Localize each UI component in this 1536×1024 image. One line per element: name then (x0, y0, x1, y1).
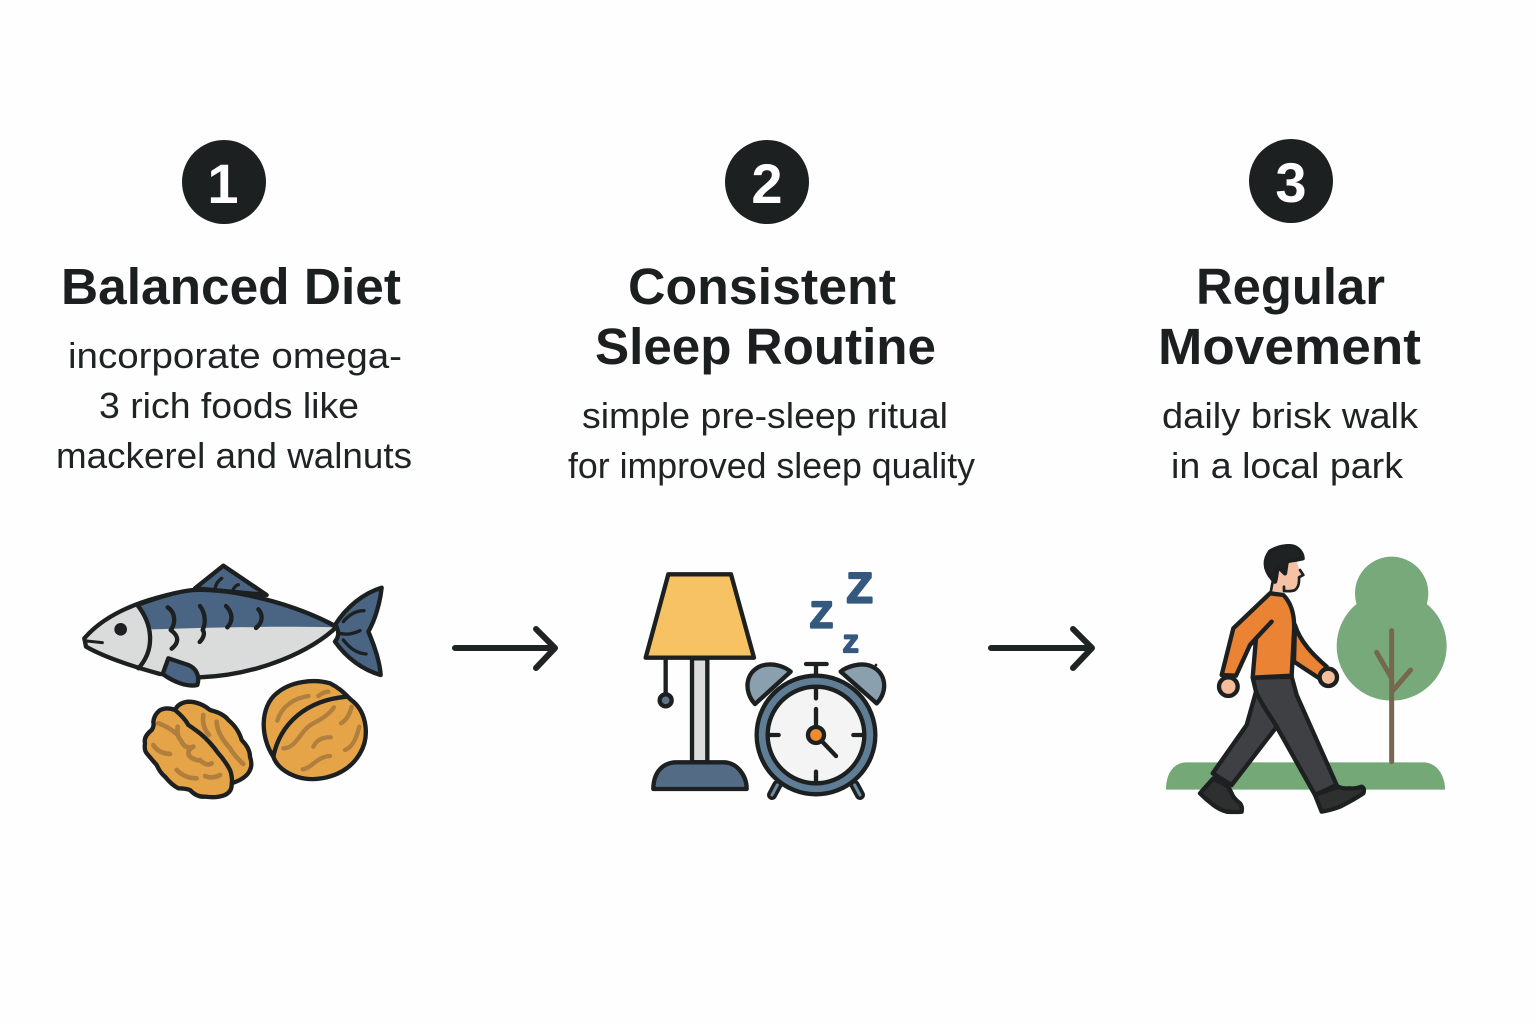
sleep letters (810, 565, 873, 658)
heading: Regular Movement: Regular (1196, 258, 1385, 315)
dorsal fin (195, 566, 267, 595)
icon: fish and walnuts (84, 566, 382, 797)
hands (1320, 669, 1337, 686)
step number 2 (725, 140, 809, 224)
description: omega-3 foods: incorporate omega- (68, 335, 402, 376)
icon: lamp and alarm clock (646, 565, 884, 795)
heading: Regular Movement (1158, 258, 1421, 375)
heading: Consistent Sleep Routine (595, 258, 936, 375)
fish back (137, 590, 336, 629)
pectoral fin (163, 658, 198, 686)
left walnut (145, 702, 251, 797)
sleep letters: Z (810, 593, 833, 635)
heading: Balanced Diet: Balanced Diet (61, 258, 401, 315)
ground (1166, 762, 1445, 790)
sweater (1222, 593, 1294, 678)
description: daily walk (1162, 395, 1419, 486)
shoes (1200, 778, 1242, 812)
description: daily walk: daily brisk walk (1162, 395, 1419, 436)
panel: regular movement (1158, 139, 1447, 812)
tree (1337, 557, 1447, 762)
description: omega-3 foods: 3 rich foods like (99, 385, 359, 426)
heading: Consistent Sleep Routine: Consistent (628, 258, 896, 315)
step number 2: 2 (751, 152, 783, 215)
lamp (646, 574, 754, 789)
step number 3 (1249, 139, 1333, 223)
fish outline details (87, 578, 366, 668)
sleep letters: Z (843, 631, 858, 658)
step number 1 (182, 140, 266, 224)
hair (1266, 546, 1303, 582)
description: pre-sleep ritual: simple pre-sleep ritual (582, 395, 948, 436)
description: omega-3 foods (56, 335, 412, 476)
fish tail (335, 588, 382, 675)
fish eye (114, 623, 127, 636)
right walnut (264, 681, 366, 779)
heading: Consistent Sleep Routine: Sleep Routine (595, 318, 936, 375)
description: daily walk: in a local park (1171, 445, 1404, 486)
head (1271, 559, 1303, 594)
step number 3: 3 (1275, 151, 1307, 214)
fish body (84, 590, 337, 677)
trousers (1213, 677, 1337, 795)
heading: Regular Movement: Movement (1158, 318, 1421, 375)
sleep letters: Z (847, 565, 873, 613)
description: omega-3 foods: mackerel and walnuts (56, 435, 412, 476)
panel: consistent sleep routine (568, 140, 975, 795)
walking person (1200, 546, 1364, 812)
description: pre-sleep ritual (568, 395, 975, 486)
arrow: step 1 to step 2 (455, 629, 555, 668)
panel: balanced diet (56, 140, 412, 797)
icon: person walking in a park (1166, 546, 1447, 812)
far arm (1294, 625, 1327, 678)
description: pre-sleep ritual: for improved sleep quality (568, 445, 975, 486)
step number 1: 1 (207, 152, 239, 215)
arrow: step 2 to step 3 (991, 629, 1092, 668)
alarm clock (747, 664, 884, 795)
